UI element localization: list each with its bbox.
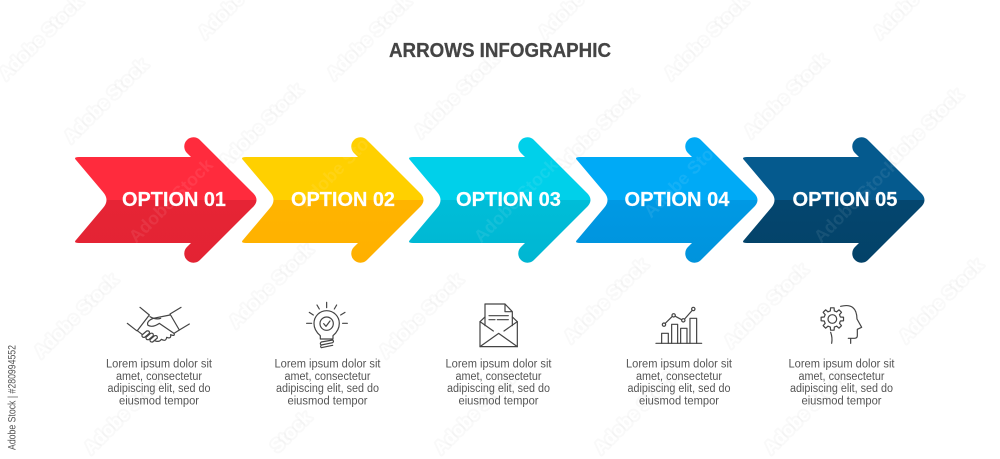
overlay watermark on arrows: Adobe Stock	[470, 154, 562, 247]
text: column 2: adipiscing elit, sed do	[276, 383, 379, 395]
text: column 1	[106, 358, 213, 408]
background watermark: Adobe Stock	[430, 365, 522, 458]
background watermark: Stock	[266, 407, 316, 456]
icon: head with gear	[821, 306, 862, 343]
arrow: option 03	[409, 137, 590, 263]
icon: bar chart with trend line	[656, 307, 702, 343]
background watermark: Adobe Stock	[760, 365, 852, 458]
background watermark: Adobe Stock	[740, 49, 832, 142]
text: column 4: adipiscing elit, sed do	[628, 383, 730, 395]
arrow: option 05	[743, 137, 924, 263]
text: column 2: eiusmod tempor	[288, 396, 368, 408]
overlay watermark on arrows: Adobe Stock	[810, 154, 902, 247]
arrow: option 04	[576, 137, 758, 263]
text: column 2	[274, 358, 381, 408]
arrow: option 02	[242, 137, 424, 263]
text: column 5	[788, 358, 895, 408]
arrow: option 05: OPTION 05	[792, 189, 898, 211]
overlay watermark on arrows: Adobe Stock	[125, 154, 217, 247]
arrow: option 04: OPTION 04	[624, 189, 730, 211]
icon: handshake	[127, 307, 189, 342]
arrow: option 02: OPTION 02	[291, 189, 395, 211]
text: column 1: Lorem ipsum dolor sit	[106, 358, 213, 370]
background watermark: Adobe Stock	[215, 79, 307, 172]
background watermark: Adobe Stock	[375, 269, 467, 362]
background watermark: Adobe Stock	[30, 269, 122, 362]
background watermark: Adobe Stock	[225, 239, 317, 332]
text: column 5: amet, consectetur	[798, 371, 885, 383]
overlay watermark on arrows: Adobe Stock	[640, 129, 732, 222]
icon: light bulb with check	[307, 302, 347, 348]
text: column 2: Lorem ipsum dolor sit	[274, 358, 381, 370]
text: column 1: eiusmod tempor	[119, 396, 199, 408]
background watermark: Adobe Stock	[720, 259, 812, 352]
text: column 4	[626, 358, 733, 408]
background watermark: Adobe Stock	[590, 365, 682, 458]
title: ARROWS INFOGRAPHIC	[389, 40, 611, 62]
background watermark: Adobe Stock	[60, 54, 152, 147]
text: column 3	[446, 358, 552, 408]
background watermark: Adobe Stock	[560, 254, 652, 347]
text: column 2: amet, consectetur	[284, 371, 371, 383]
icon: envelope with letter	[480, 304, 517, 347]
text: column 4: Lorem ipsum dolor sit	[626, 358, 733, 370]
text: column 3: adipiscing elit, sed do	[447, 383, 550, 395]
arrow: option 03: OPTION 03	[456, 189, 561, 211]
text: column 5: eiusmod tempor	[802, 396, 882, 408]
overlay watermark on arrows: Adobe Stock	[295, 119, 387, 212]
background watermark: Adobe Stock	[895, 254, 987, 347]
stock id side label: Adobe Stock | #280994552	[6, 345, 18, 450]
text: column 3: Lorem ipsum dolor sit	[446, 358, 552, 370]
text: column 1: adipiscing elit, sed do	[108, 383, 210, 395]
text: column 5: Lorem ipsum dolor sit	[788, 358, 895, 370]
background watermark: Adobe Stock	[410, 49, 502, 142]
text: column 4: amet, consectetur	[636, 371, 722, 383]
arrow: option 01	[75, 137, 256, 263]
text: column 3: eiusmod tempor	[458, 396, 539, 408]
arrow: option 01: OPTION 01	[122, 189, 226, 211]
overlay watermark on arrows	[125, 119, 902, 247]
text: column 5: adipiscing elit, sed do	[790, 383, 893, 395]
text: column 3: amet, consectetur	[456, 371, 542, 383]
background watermark: Adobe Stock	[875, 84, 967, 177]
background watermark: Adobe Stock	[550, 84, 642, 177]
text: column 4: eiusmod tempor	[639, 396, 719, 408]
background watermark: Adobe Stock	[80, 365, 172, 458]
text: column 1: amet, consectetur	[116, 371, 202, 383]
